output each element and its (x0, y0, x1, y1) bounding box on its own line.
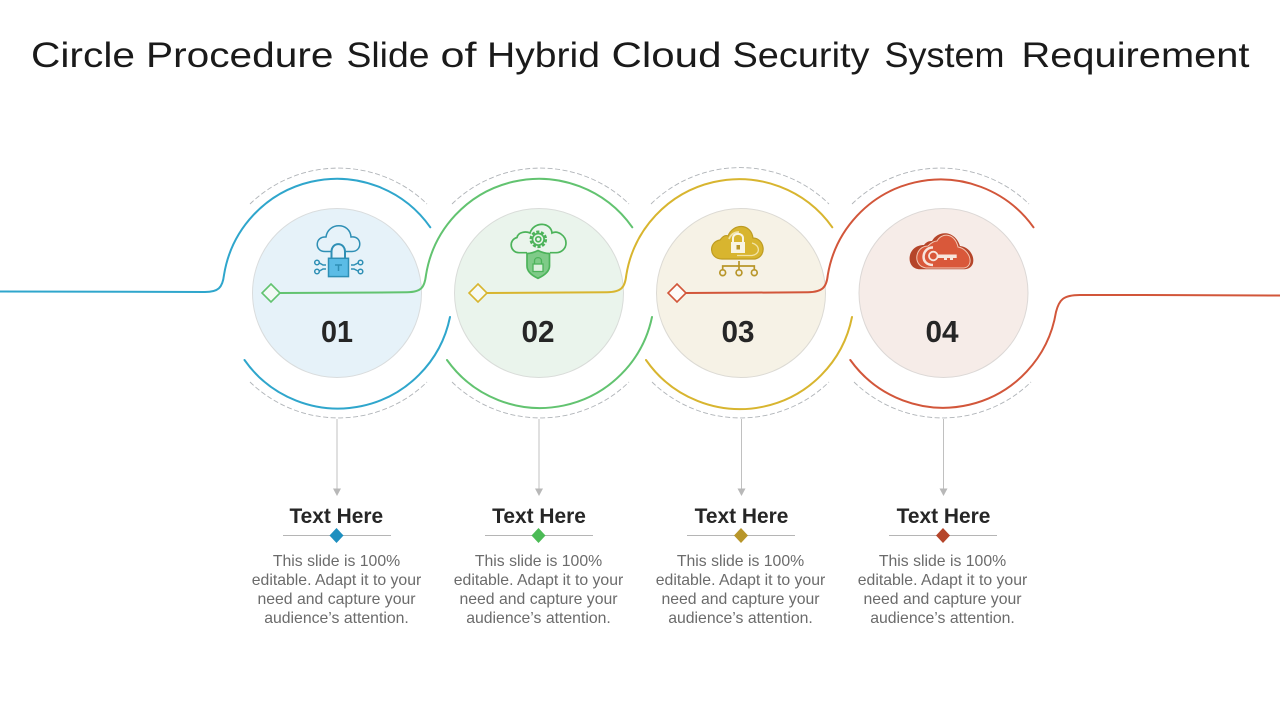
text block 3 (656, 505, 825, 627)
title: Security (732, 35, 870, 75)
yellow connector line and arcs (469, 179, 852, 409)
title: Slide (346, 35, 430, 75)
blue connector line and arcs (0, 179, 450, 409)
title: System (884, 35, 1004, 75)
text block 2: editable. Adapt it to your (454, 572, 623, 589)
arrow 2 (535, 419, 543, 496)
text block 4 (858, 505, 1027, 627)
icon: cloud with gear and shield (511, 224, 566, 278)
icon: cloud with padlock and circuit (315, 226, 363, 277)
text block 2: Text Here (492, 505, 586, 528)
step 2: circle panel (454, 208, 624, 378)
text block 1: editable. Adapt it to your (252, 572, 421, 589)
text block 1: Text Here (289, 505, 383, 528)
green connector line and arcs (262, 179, 652, 408)
arrow 4 (940, 419, 948, 496)
icon: gold cloud with padlock and network (712, 226, 763, 276)
text block 2: This slide is 100% (475, 553, 602, 570)
text block 3: This slide is 100% (677, 553, 804, 570)
title: of (440, 35, 477, 75)
red connector line and arcs (668, 180, 1280, 408)
text block 2: need and capture your (459, 591, 618, 608)
title: Cloud (612, 35, 722, 75)
step number 03: 03 (722, 314, 754, 349)
text block 2 (454, 505, 623, 627)
text block 3: Text Here (695, 505, 788, 528)
text block 1: This slide is 100% (273, 553, 400, 570)
step number 04: 04 (926, 314, 959, 349)
arrow 1 (333, 419, 341, 496)
text block 4: audience’s attention. (870, 610, 1015, 627)
text block 4: editable. Adapt it to your (858, 572, 1027, 589)
text block 1: audience’s attention. (264, 610, 409, 627)
text block 3: audience’s attention. (668, 610, 813, 627)
text block 1 (252, 505, 421, 627)
title: Circle (31, 35, 135, 75)
title: Procedure (146, 35, 334, 75)
title (31, 35, 1250, 75)
title: Requirement (1022, 35, 1250, 75)
title: Hybrid (487, 35, 600, 75)
text block 1: need and capture your (257, 591, 416, 608)
icon: red cloud with key (910, 233, 973, 269)
text block 3: editable. Adapt it to your (656, 572, 825, 589)
text block 4: Text Here (897, 505, 990, 528)
text block 4: need and capture your (863, 591, 1022, 608)
step 4: circle panel (859, 208, 1028, 378)
step 3: circle panel (656, 208, 826, 378)
step number 02: 02 (522, 314, 554, 349)
text block 2: audience’s attention. (466, 610, 611, 627)
text block 4: This slide is 100% (879, 553, 1006, 570)
text block 3: need and capture your (661, 591, 820, 608)
dashed outer rings (250, 168, 1031, 418)
step number 01: 01 (321, 314, 353, 349)
arrow 3 (738, 419, 746, 496)
step 1: circle panel (252, 208, 422, 378)
